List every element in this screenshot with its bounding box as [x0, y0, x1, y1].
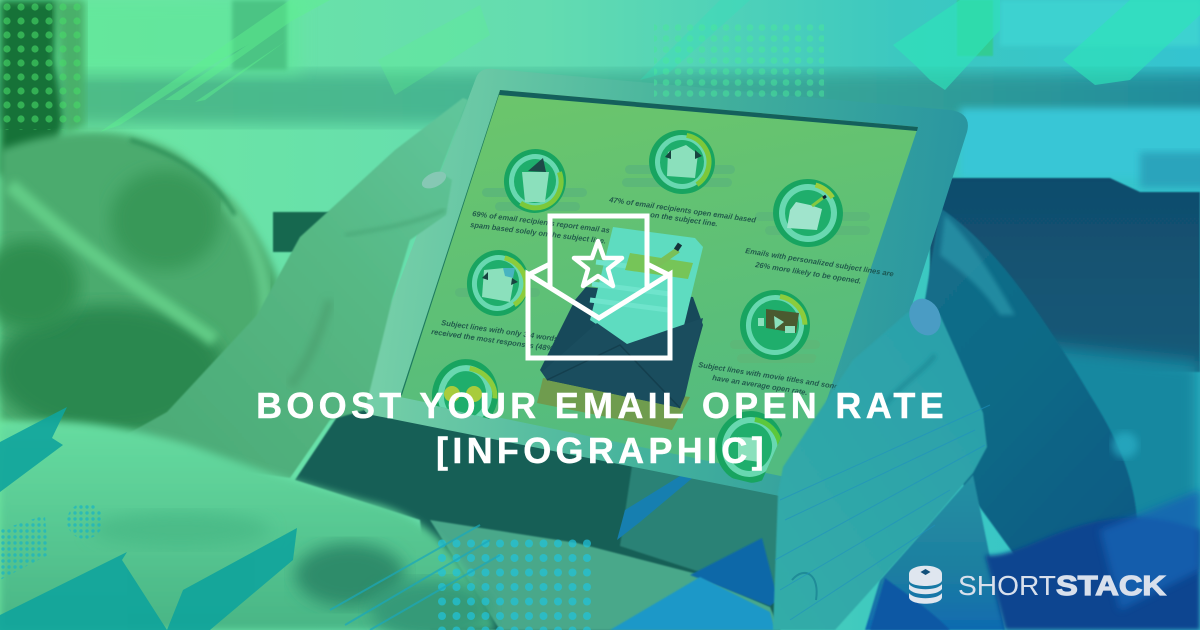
tablet captions: 69% of email recipients report email as: [472, 209, 610, 235]
badge: video: [740, 290, 810, 360]
window band: [0, 72, 1200, 124]
logo: ShortStack: [909, 566, 1166, 604]
badge: trash: [482, 149, 587, 213]
tablet frame: [363, 69, 968, 507]
bracelet: [792, 573, 817, 600]
envelope back: [540, 287, 703, 408]
lap: [295, 405, 790, 630]
right hand: [773, 293, 990, 630]
tablet: [363, 69, 968, 507]
hand lines: [775, 405, 990, 620]
sweater dark knit: [110, 170, 220, 270]
sofa right: [930, 178, 1200, 372]
badge: bottom right: [716, 411, 782, 483]
tablet captions: on the subject line.: [650, 210, 718, 228]
sweater on the left: [0, 0, 290, 440]
halftone over hair: [0, 0, 85, 130]
tablet captions: 47% of email recipients open email based: [608, 195, 757, 225]
tablet captions: have an average open rate.: [712, 373, 808, 397]
knit sweater: [430, 520, 780, 630]
dotted patch: [0, 515, 48, 580]
tablet captions: Subject lines with movie titles and song lyrics: [698, 360, 861, 395]
shadow of knuckle: [345, 210, 445, 235]
tablet captions: received the most responses (48%).: [431, 327, 558, 354]
badge: envelope small: [456, 250, 534, 316]
blue stroke on lap: [617, 475, 696, 540]
title: BOOST YOUR EMAIL OPEN RATE: [256, 385, 948, 426]
tablet captions: Emails with personalized subject lines are: [745, 246, 894, 278]
small round dot circle: [67, 503, 103, 539]
central email illustration: [537, 227, 703, 430]
envelope front: [542, 318, 703, 408]
badge: pencil: [756, 179, 870, 247]
title: [INFOGRAPHIC]: [436, 430, 768, 471]
envelope shadow: [537, 378, 690, 430]
logo wordmark: [958, 570, 1166, 601]
star: [574, 241, 622, 286]
hair: [0, 0, 65, 185]
tablet captions: Subject lines with only 3-4 words: [441, 318, 559, 343]
logo wordmark: SHORT: [958, 570, 1056, 601]
nail left: [419, 168, 449, 192]
fabric sleeve right: [865, 475, 1200, 630]
letter: [590, 227, 703, 345]
tablet screen: [400, 90, 918, 480]
leg on the right: [925, 208, 1138, 590]
dots on blanket: [436, 535, 596, 630]
left hand: [117, 98, 468, 478]
grey fabric patch: [620, 466, 782, 595]
tablet captions: 26% more likely to be opened.: [754, 260, 862, 286]
badge: envelope: [622, 130, 735, 194]
nail right: [903, 293, 947, 341]
tablet captions: [431, 195, 894, 397]
logo wordmark: STACK: [1056, 570, 1166, 601]
halftone dots on top: [654, 22, 824, 100]
envelope icon with star: [528, 216, 670, 358]
tablet captions: spam based solely on the subject line.: [470, 220, 607, 246]
blue patch: [690, 538, 778, 606]
blanket foreground: [0, 421, 596, 630]
logo icon: stack: [909, 566, 942, 604]
badge: smileys: [432, 359, 498, 419]
title: [256, 385, 948, 471]
